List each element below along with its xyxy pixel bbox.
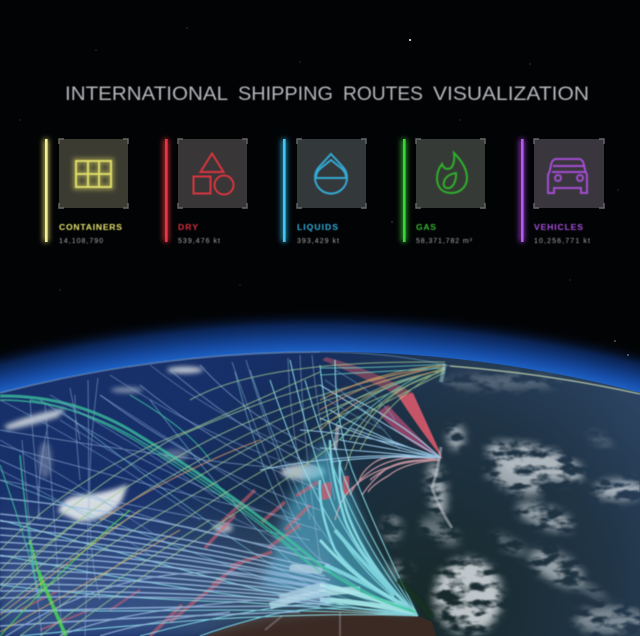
routes: soft cyan fan fill	[260, 440, 412, 612]
routes: bright green	[0, 510, 130, 636]
title: SHIPPING	[238, 84, 333, 105]
earth globe with routes	[0, 340, 640, 636]
land: southern coast details	[265, 612, 340, 636]
category: liquids	[282, 139, 366, 245]
icon: liquid drop	[315, 154, 347, 194]
routes: pink-tan from eastern port	[335, 456, 440, 520]
clouds: western clouds	[4, 366, 325, 533]
routes: blue wedges from eastern port	[260, 385, 441, 470]
land: port coastline	[432, 447, 452, 528]
icon: dry shapes	[194, 154, 234, 194]
category: vehicles: 10,256,771 kt	[534, 238, 590, 245]
routes: cyan fan from southern port	[0, 360, 418, 636]
category: vehicles	[520, 139, 604, 245]
atmosphere glow	[0, 300, 640, 636]
category: gas: 58,371,782 m³	[416, 238, 473, 245]
routes: red wedges	[322, 357, 443, 500]
category: dry	[164, 139, 247, 245]
stars	[20, 28, 629, 356]
category: containers	[44, 139, 128, 245]
routes: green arcs	[0, 395, 415, 612]
routes: far-reaching fan lines	[0, 370, 418, 616]
category: containers: 14,108,790	[59, 238, 103, 245]
title: INTERNATIONAL	[65, 84, 228, 105]
land: coastal dark strip	[398, 580, 432, 618]
category: liquids: 393,429 kt	[297, 238, 339, 245]
category: gas: GAS	[416, 222, 436, 232]
routes	[0, 355, 445, 636]
category: gas	[402, 139, 485, 245]
category: containers: CONTAINERS	[59, 222, 122, 232]
icon: gas flame	[437, 153, 467, 193]
category: liquids: LIQUIDS	[297, 222, 338, 232]
routes: vertical pale meridian lines	[22, 355, 335, 636]
ocean	[0, 340, 640, 636]
title: ROUTES	[343, 84, 423, 105]
category: dry: DRY	[178, 222, 198, 232]
land: southern landmass	[205, 609, 436, 636]
clouds: eastern textured cloud field	[378, 370, 640, 636]
routes: tan-green diagonals to top junction	[0, 362, 445, 636]
category: vehicles: VEHICLES	[534, 222, 583, 232]
horizon line	[0, 352, 640, 394]
category: dry: 539,476 kt	[178, 238, 220, 245]
routes: top junction glow	[335, 364, 445, 450]
routes: salmon scattered strokes	[20, 482, 318, 636]
routes: pale blue horizontal lines	[0, 365, 330, 636]
title: VISUALIZATION	[433, 84, 589, 105]
title	[65, 84, 589, 105]
icon: vehicle	[548, 159, 587, 193]
routes: north-west pale streaks	[0, 365, 400, 555]
icon: container grid	[76, 161, 111, 187]
routes: pale lower-left haze	[0, 508, 340, 636]
